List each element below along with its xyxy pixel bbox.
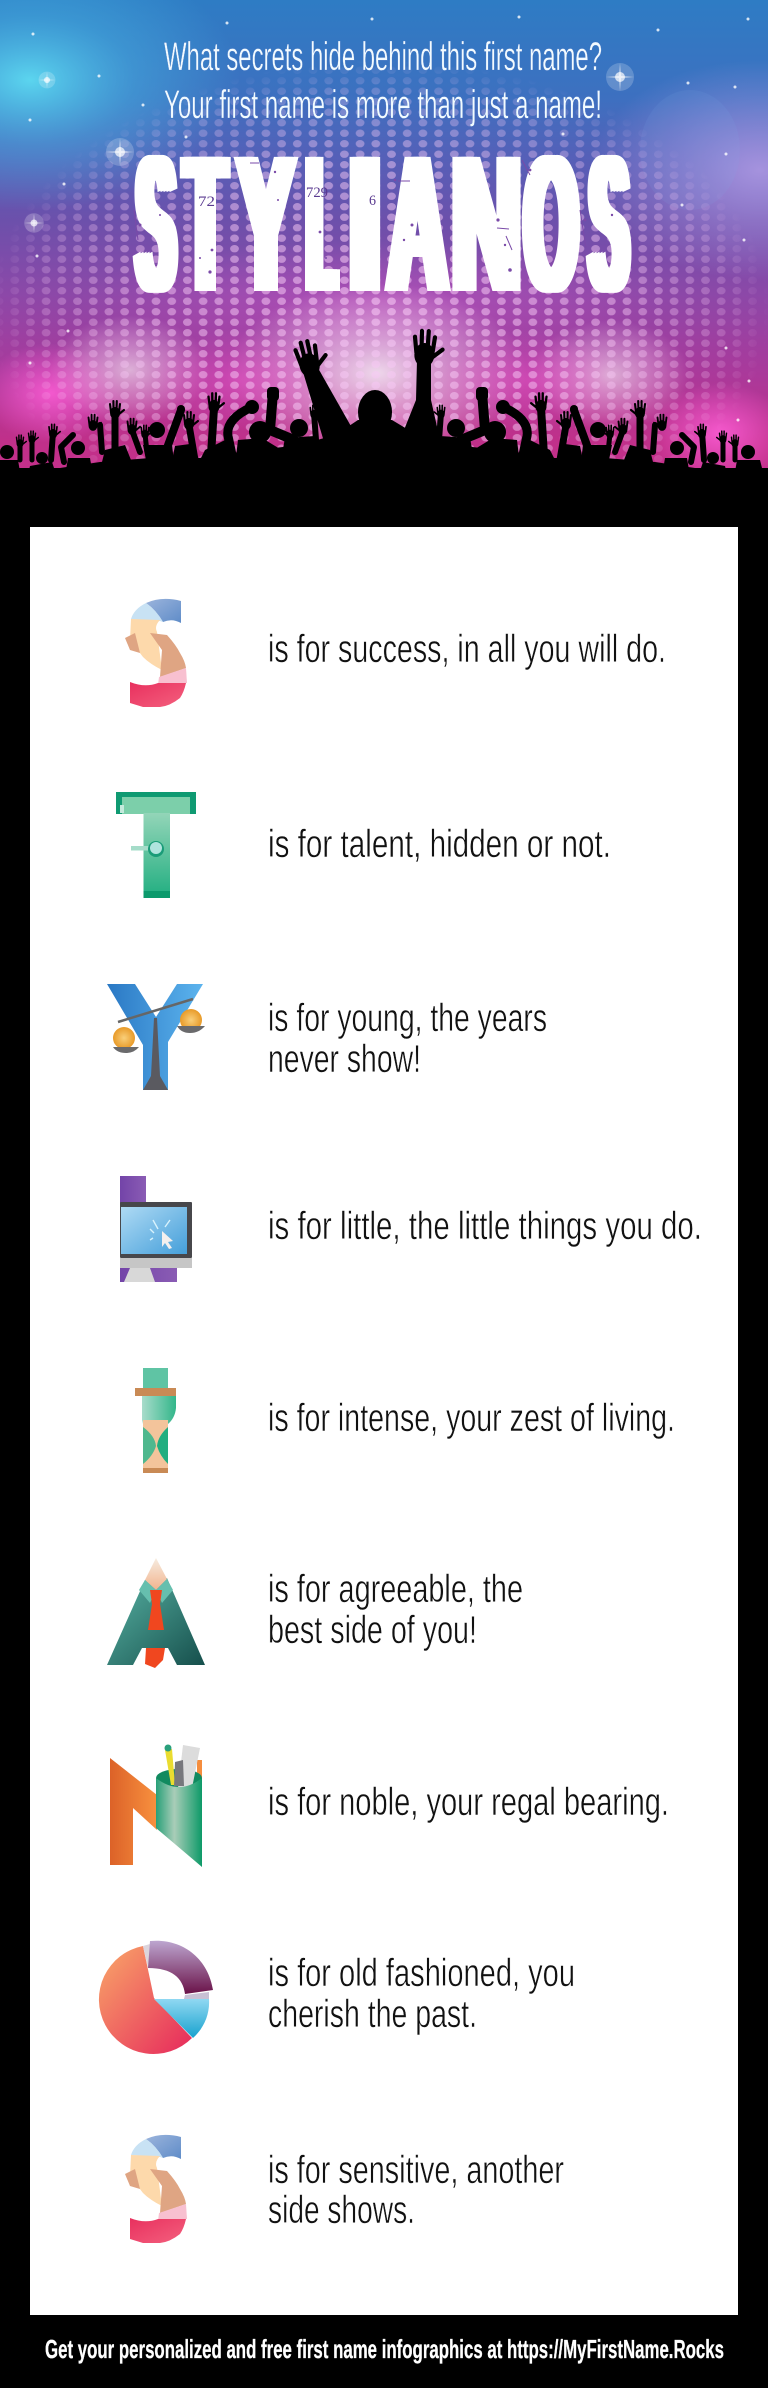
text: old fashioned: cherish the past. (268, 1993, 477, 2036)
name title: O (525, 115, 578, 333)
row 4: letter L (120, 1176, 702, 1282)
text: sensitive (268, 2149, 564, 2232)
text: young (268, 997, 547, 1081)
header background: concert stage lights (0, 0, 768, 468)
crowd silhouette (0, 331, 768, 534)
icon: Y scales (107, 984, 205, 1090)
row 3: letter Y (107, 984, 547, 1090)
name title: N (452, 115, 521, 333)
icon: S handshake repeat (125, 2135, 187, 2243)
icon: O pie chart (99, 1941, 213, 2054)
title distress marks (134, 160, 613, 274)
icon: A suit and tie (107, 1558, 205, 1668)
row 9: letter S (125, 2135, 564, 2243)
title distress marks: 6 (369, 193, 376, 209)
white panel (30, 527, 738, 2315)
text: agreeable (268, 1568, 523, 1652)
row 6: letter A (107, 1558, 523, 1668)
title distress marks: 729 (306, 185, 328, 201)
title distress marks: 72 (198, 194, 215, 210)
text: old fashioned: is for old fashioned, you (268, 1952, 575, 1995)
name title: S (137, 115, 174, 333)
name title: S (590, 115, 627, 333)
name title (132, 115, 632, 333)
row 8: letter O (99, 1941, 575, 2054)
text: agreeable: best side of you! (268, 1609, 477, 1652)
row 5: letter I (135, 1368, 675, 1473)
name title: T (185, 115, 225, 333)
name title: L (308, 115, 335, 333)
text: sensitive: is for sensitive, another (268, 2149, 564, 2192)
row 7: letter N (110, 1744, 669, 1867)
text: old fashioned (268, 1952, 575, 2036)
row 2: letter T (116, 792, 611, 898)
icon: L computer (120, 1176, 192, 1282)
icon: I hourglass (135, 1368, 176, 1473)
text: agreeable: is for agreeable, the (268, 1568, 523, 1611)
row 1: letter S (125, 599, 666, 707)
name title: A (388, 115, 447, 333)
header question lines (164, 35, 602, 127)
text: sensitive: side shows. (268, 2189, 415, 2232)
text: talent: is for talent, hidden or not. (268, 823, 611, 866)
icon: S handshake (125, 599, 187, 707)
text: young: is for young, the years (268, 997, 547, 1040)
name title: Y (238, 115, 294, 333)
icon: N pencil cup (110, 1744, 202, 1867)
icon: T door (116, 792, 196, 898)
name title: I (347, 115, 383, 333)
text: young: never show! (268, 1038, 421, 1081)
